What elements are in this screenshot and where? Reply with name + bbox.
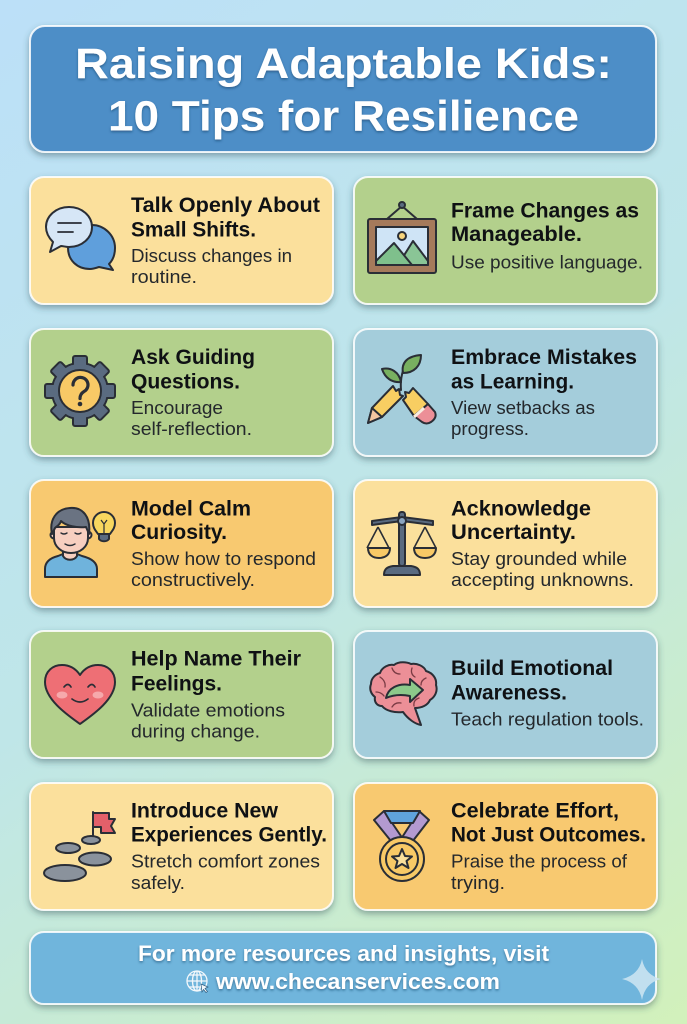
tip heading: Manageable. [451, 222, 582, 246]
title banner [30, 26, 656, 152]
panel: tip 10 celebrate effort [354, 783, 657, 910]
icon: framed picture [368, 202, 436, 273]
tip text [131, 398, 252, 439]
panel: tip 8 emotional awareness [354, 631, 657, 758]
tip text: Show how to respond [131, 549, 316, 569]
tip text: accepting unknowns. [451, 570, 634, 590]
tip heading: Embrace Mistakes [451, 345, 637, 369]
tip heading: Ask Guiding [131, 345, 255, 369]
tip text [131, 549, 316, 590]
tip text: during change. [131, 722, 260, 742]
tip text: Teach regulation tools. [451, 709, 644, 729]
panel: tip 7 name feelings [30, 631, 333, 758]
tip text: constructively. [131, 570, 255, 590]
tip heading: as Learning. [451, 369, 574, 393]
footer text: www.checanservices.com [215, 969, 500, 994]
tip text [451, 398, 595, 439]
tip heading: Model Calm [131, 497, 251, 521]
tip heading: Introduce New [131, 799, 278, 823]
tip heading [451, 198, 639, 246]
title: Raising Adaptable Kids: [75, 40, 612, 88]
icon: gear with question mark [45, 356, 115, 426]
icon: globe with cursor [187, 971, 208, 992]
panel: tip 9 new experiences [30, 783, 333, 910]
icon: stepping stones and flag [44, 812, 115, 881]
tip text: routine. [131, 267, 197, 287]
tip heading: Awareness. [451, 680, 567, 704]
tip text: Encourage [131, 398, 223, 418]
tip text: Validate emotions [131, 701, 285, 721]
panel: tip 2 frame changes [354, 177, 657, 304]
tip text: Discuss changes in [131, 246, 292, 266]
icon: medal [374, 811, 429, 881]
tip heading: Experiences Gently. [131, 823, 327, 847]
panel: tip 4 embrace mistakes [354, 329, 657, 456]
tip text: progress. [451, 419, 529, 439]
tip heading [451, 497, 591, 544]
tip heading: Curiosity. [131, 520, 227, 544]
tip heading: Build Emotional [451, 656, 613, 680]
tip heading: Celebrate Effort, [451, 799, 619, 823]
tip heading [131, 193, 320, 242]
tip text: safely. [131, 873, 185, 893]
tip heading [451, 345, 637, 393]
tip text: Praise the process of [451, 852, 628, 872]
tip heading: Not Just Outcomes. [451, 823, 646, 847]
tip heading [451, 799, 646, 847]
tip text: self-reflection. [131, 419, 252, 439]
tip text: Stay grounded while [451, 549, 627, 569]
tip heading [451, 656, 613, 704]
tip heading: Questions. [131, 369, 240, 393]
footer text: For more resources and insights, visit [138, 941, 550, 966]
footer banner [30, 932, 661, 1004]
icon: brain with arrow [370, 662, 437, 725]
tip text [451, 852, 628, 893]
tip heading [131, 497, 251, 544]
tip text: trying. [451, 873, 505, 893]
icon: broken pencil with sprout [368, 355, 436, 424]
title: 10 Tips for Resilience [108, 92, 579, 140]
panel: tip 5 model calm curiosity [30, 480, 333, 607]
tip text: View setbacks as [451, 398, 595, 418]
title [75, 40, 612, 140]
icon: smiling heart [45, 665, 115, 724]
footer text [138, 941, 550, 994]
tip heading [131, 647, 302, 696]
icon: sparkle [622, 959, 661, 1000]
panel: tip 6 acknowledge uncertainty [354, 480, 657, 607]
tip heading [131, 799, 327, 847]
tip heading: Talk Openly About [131, 193, 320, 217]
tip text: Use positive language. [451, 252, 643, 272]
panel: tip 3 guiding questions [30, 329, 333, 456]
tip heading [131, 345, 255, 393]
tip heading: Feelings. [131, 672, 222, 696]
tip text [131, 701, 285, 742]
panel: tip 1 talk openly [30, 177, 333, 304]
tip heading: Small Shifts. [131, 218, 256, 242]
icon: speech bubbles [46, 207, 115, 270]
icon: balance scales [367, 512, 436, 575]
tip heading: Frame Changes as [451, 198, 639, 222]
icon: calm person with light bulb [45, 508, 115, 577]
tip text [131, 852, 320, 893]
tip heading: Help Name Their [131, 647, 302, 671]
tip text: Stretch comfort zones [131, 852, 320, 872]
tip heading: Uncertainty. [451, 520, 576, 544]
tip heading: Acknowledge [451, 497, 591, 521]
tip text [451, 549, 634, 590]
tip text [131, 246, 292, 287]
